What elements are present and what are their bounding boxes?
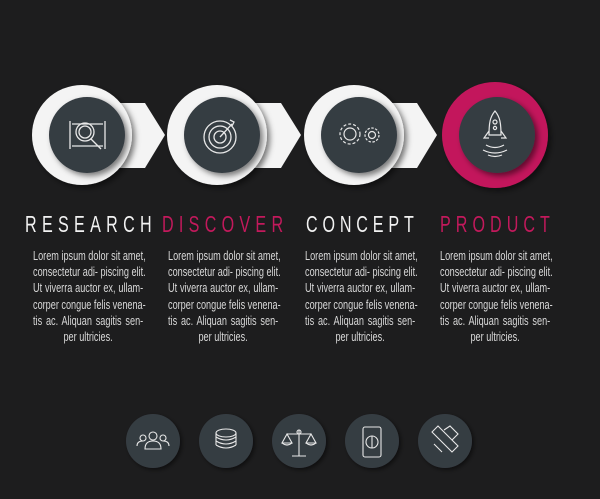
text: discover: consectetur adi- piscing elit. xyxy=(168,265,281,279)
text: product xyxy=(440,249,553,344)
icon: handshake xyxy=(418,414,472,468)
text: product: Ut viverra auctor ex, ullam- xyxy=(440,281,550,295)
text: research xyxy=(33,249,146,344)
text: product: per ultricies. xyxy=(470,330,520,344)
step 1: research xyxy=(32,85,165,185)
step 4: product xyxy=(442,82,548,188)
text: concept: Ut viverra auctor ex, ullam- xyxy=(305,281,415,295)
text: concept: consectetur adi- piscing elit. xyxy=(305,265,418,279)
text: discover: tis ac. Aliquan sagitis sen- xyxy=(168,314,278,328)
text: research: tis ac. Aliquan sagitis sen- xyxy=(33,314,143,328)
icon: magnifier xyxy=(70,121,105,149)
text: concept xyxy=(305,249,418,344)
text: discover: corper congue felis venena- xyxy=(168,298,281,312)
icon: target xyxy=(204,120,236,153)
icon: rocket xyxy=(483,111,507,156)
icon: scales xyxy=(272,414,326,468)
text: product: Lorem ipsum dolor sit amet, xyxy=(440,249,553,263)
text: concept: tis ac. Aliquan sagitis sen- xyxy=(305,314,415,328)
heading: concept: CONCEPT xyxy=(306,212,414,238)
text: research: consectetur adi- piscing elit. xyxy=(33,265,146,279)
text: product: tis ac. Aliquan sagitis sen- xyxy=(440,314,550,328)
text: research: Ut viverra auctor ex, ullam- xyxy=(33,281,143,295)
text: research: Lorem ipsum dolor sit amet, xyxy=(33,249,146,263)
text: discover: Lorem ipsum dolor sit amet, xyxy=(168,249,281,263)
step 2: discover xyxy=(167,85,301,185)
text: discover: Ut viverra auctor ex, ullam- xyxy=(168,281,278,295)
heading: research: RESEARCH xyxy=(25,212,152,238)
text: concept: per ultricies. xyxy=(335,330,385,344)
heading: discover: DISCOVER xyxy=(162,212,283,238)
icon: mobile xyxy=(345,414,399,468)
step 3: concept xyxy=(304,85,437,185)
text: concept: corper congue felis venena- xyxy=(305,298,418,312)
text: product: consectetur adi- piscing elit. xyxy=(440,265,553,279)
icon: gears xyxy=(340,124,379,144)
text: discover xyxy=(168,249,281,344)
heading: product: PRODUCT xyxy=(440,212,550,238)
text: research: corper congue felis venena- xyxy=(33,298,146,312)
text: research: per ultricies. xyxy=(63,330,113,344)
text: product: corper congue felis venena- xyxy=(440,298,553,312)
icon: coins xyxy=(199,414,253,468)
icon: people xyxy=(126,414,180,468)
text: concept: Lorem ipsum dolor sit amet, xyxy=(305,249,418,263)
text: discover: per ultricies. xyxy=(198,330,248,344)
